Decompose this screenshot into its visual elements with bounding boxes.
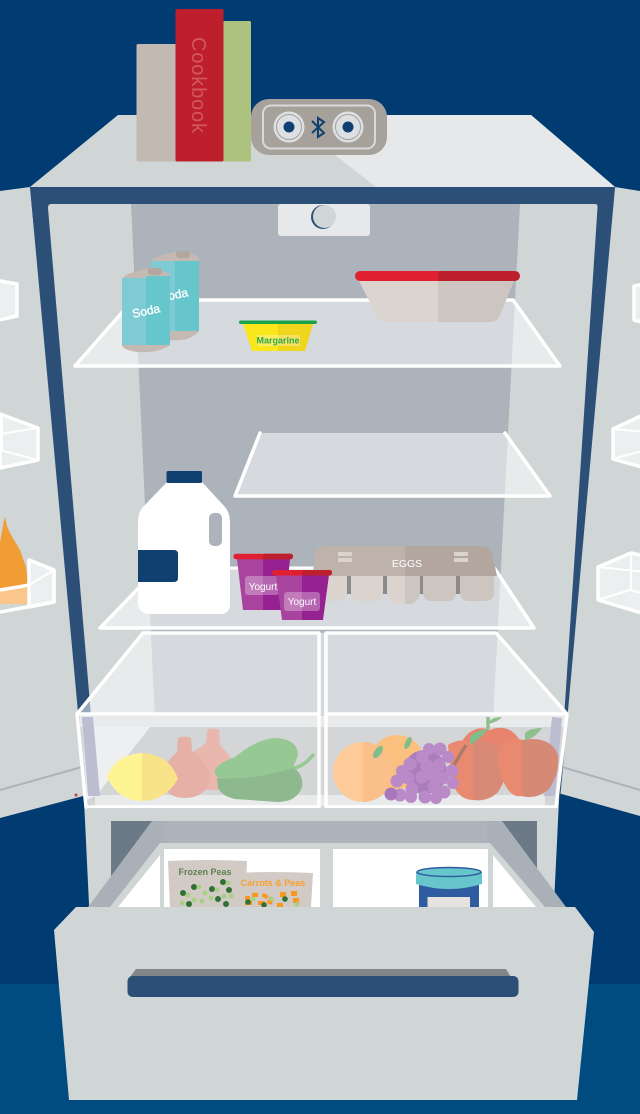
right door bin bottom (598, 553, 640, 614)
margarine tub: Margarine (256, 336, 300, 346)
front vegetable (162, 736, 210, 798)
yogurt cup back (234, 554, 293, 610)
book: plain (136, 44, 176, 162)
soda can back (151, 251, 199, 340)
freezer drawer front (54, 907, 594, 1100)
green pepper (215, 738, 313, 802)
top of refrigerator (30, 115, 615, 187)
margarine tub (239, 320, 317, 351)
book: cookbook (176, 9, 224, 162)
icon: bluetooth (312, 118, 324, 137)
freezer rails (88, 821, 566, 907)
egg carton: EGGS (392, 558, 422, 570)
soda can front: Soda (131, 301, 162, 321)
lower cabinet (84, 800, 559, 925)
mustard bottle (0, 517, 29, 604)
left door bin middle (0, 414, 38, 468)
right door bin top (634, 284, 640, 323)
top shelf (75, 300, 560, 366)
books (136, 9, 251, 162)
crisper front panels (78, 714, 566, 807)
bluetooth speaker (251, 99, 387, 155)
crisper white frame (77, 633, 567, 807)
book: green (223, 21, 251, 162)
crisper lower bands (80, 716, 566, 806)
right door (558, 187, 640, 816)
carrots and peas bag: Carrots & Peas (241, 878, 305, 888)
left door (0, 187, 87, 818)
right apple (498, 728, 558, 797)
interior light (278, 204, 370, 236)
grapes (384, 742, 466, 804)
middle shelf (235, 433, 550, 496)
left speaker cone (274, 112, 304, 142)
drawer handle (128, 969, 518, 997)
back vegetable (193, 728, 235, 790)
crisper back panels (79, 633, 565, 714)
navy frame (30, 187, 615, 800)
freezer drawer interior (110, 843, 545, 907)
interior side walls (48, 204, 598, 810)
frozen peas bag (168, 860, 247, 907)
freezer opening (87, 808, 557, 911)
left door bin top (0, 280, 17, 321)
middle apple (448, 729, 506, 800)
soda can back: Soda (159, 285, 190, 305)
lemon (107, 753, 178, 801)
carrots and peas bag (233, 872, 313, 908)
leftover container (355, 271, 520, 322)
yogurt cup front (272, 570, 332, 620)
left door bin bottom (0, 560, 54, 612)
crisper drawers (77, 633, 567, 807)
milk jug (138, 471, 230, 614)
book: cookbook: Cookbook (187, 37, 209, 134)
frozen peas bag: Frozen Peas (178, 867, 232, 877)
right speaker cone (332, 112, 364, 142)
oranges (333, 735, 424, 802)
pink vegetables (162, 728, 235, 798)
right door bin middle (613, 414, 640, 468)
soda can front (122, 268, 170, 352)
crisper right post (544, 717, 562, 796)
yogurt cup front: Yogurt (288, 597, 316, 608)
lower shelf (100, 568, 534, 628)
yogurt cup back: Yogurt (249, 582, 277, 593)
crisper left side glass (82, 717, 150, 800)
back apple (457, 717, 522, 770)
interior back wall (131, 204, 520, 720)
crisper left post (82, 717, 100, 796)
egg carton (313, 546, 497, 604)
ice cream tub (416, 868, 482, 907)
